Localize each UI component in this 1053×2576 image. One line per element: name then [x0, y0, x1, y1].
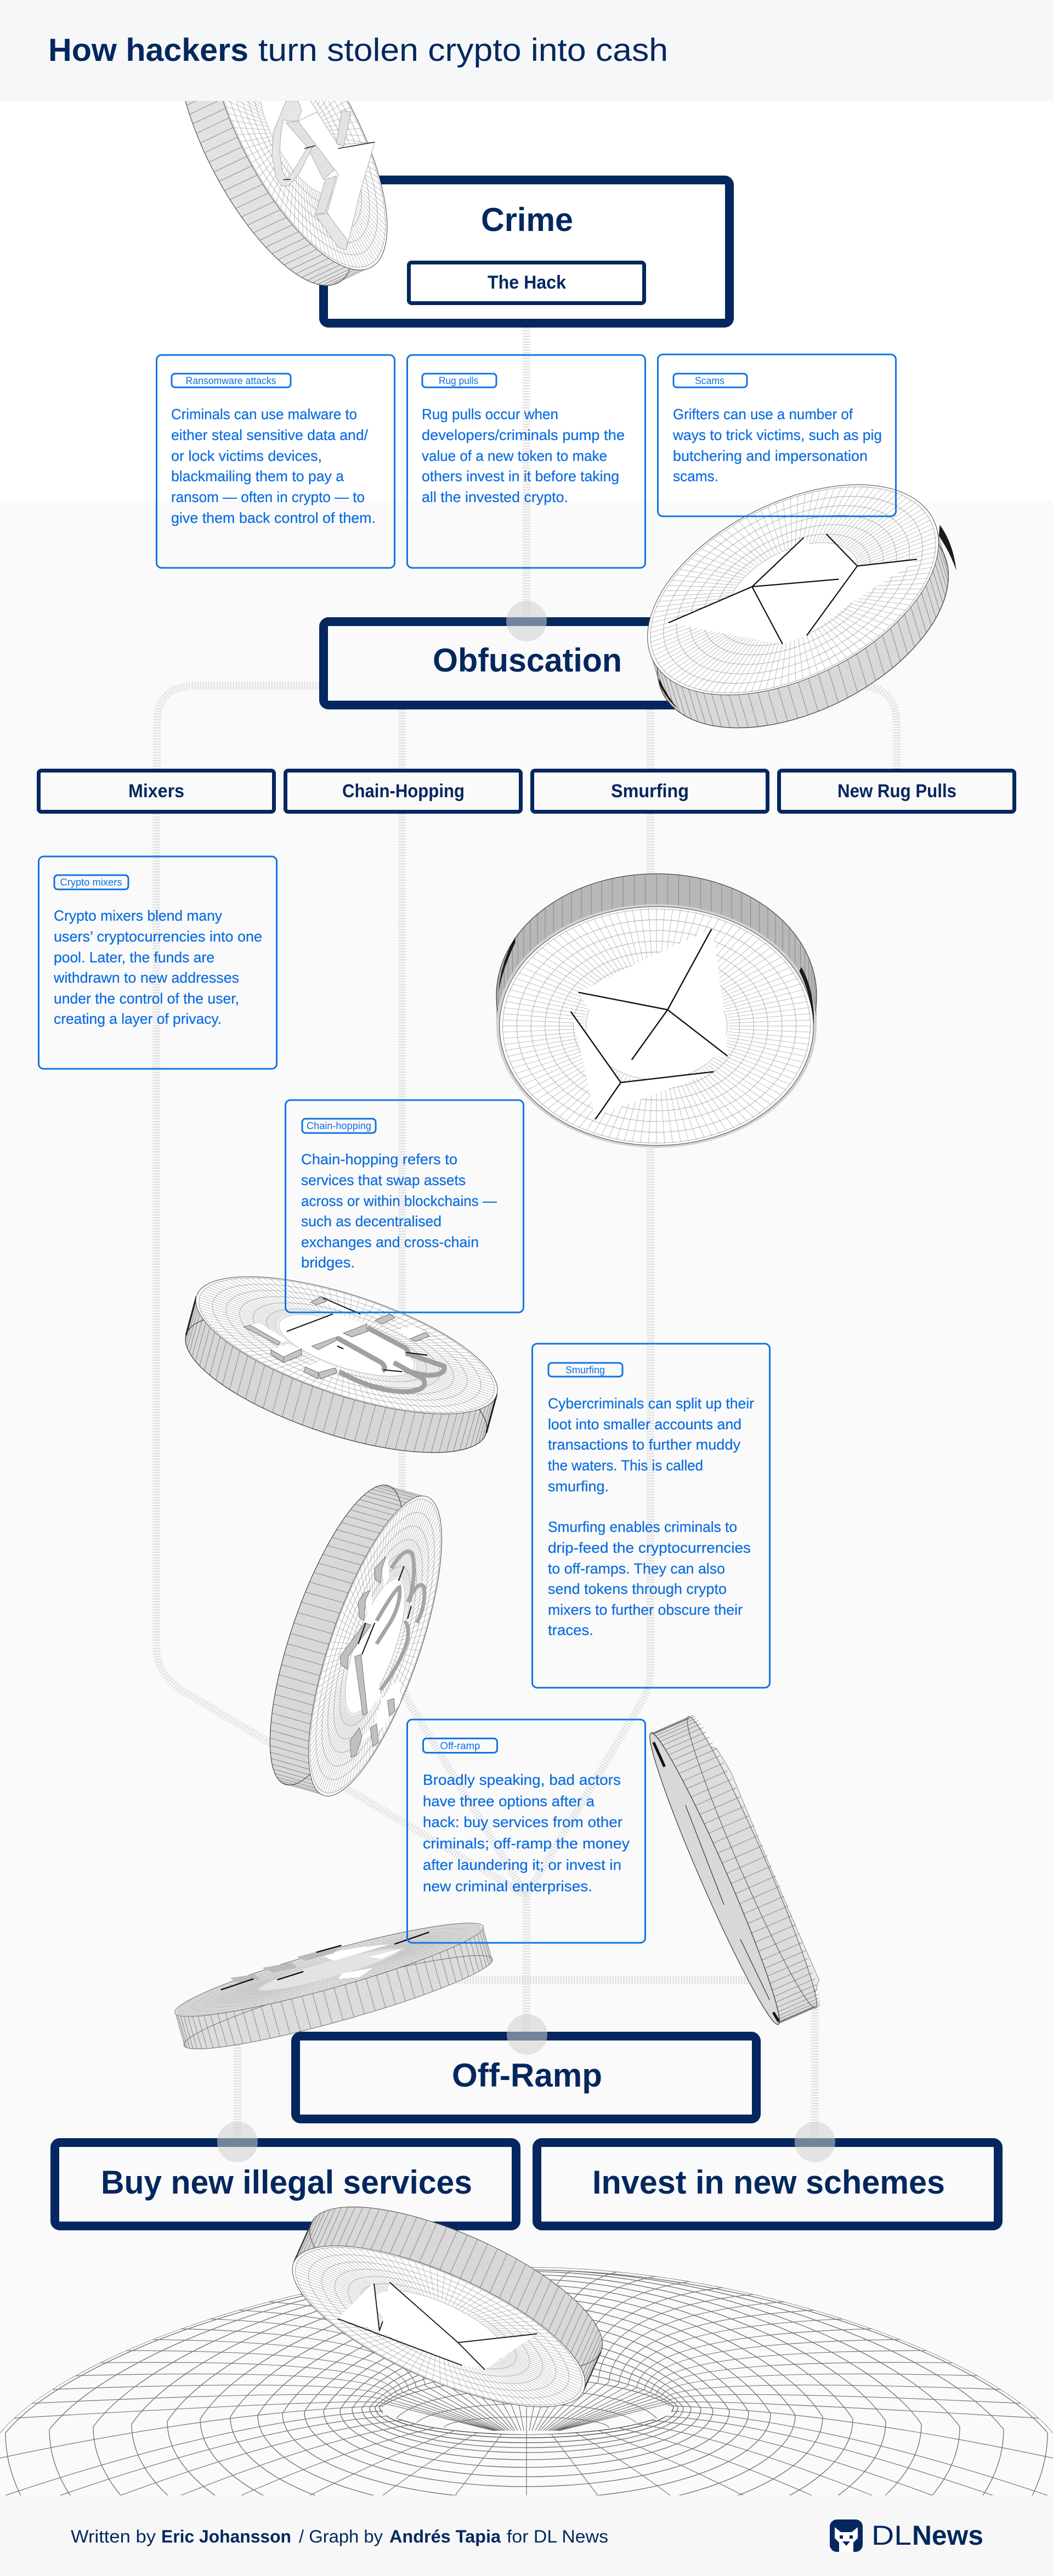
body text: value of a new token to make: [422, 448, 607, 464]
body text: Criminals can use malware to: [171, 406, 357, 422]
connector lines between stages: [156, 328, 897, 2142]
box: Off-Ramp: [296, 2036, 756, 2119]
tag: Rug pulls: Rug pulls: [439, 375, 478, 386]
tag: Chain-hopping: [302, 1119, 376, 1133]
body text: send tokens through crypto: [548, 1581, 727, 1597]
card: Scams: [658, 354, 896, 516]
card: Crypto mixers: [38, 856, 276, 1069]
body text: butchering and impersonation: [673, 448, 868, 464]
coin: bitcoin standing upright: [24, 1411, 469, 1808]
header band: [0, 0, 1053, 101]
box: Off-Ramp: Off-Ramp: [452, 2057, 602, 2094]
box: Invest in new schemes: Invest in new schemes: [592, 2164, 945, 2201]
card: Chain-hopping: [285, 1100, 523, 1312]
body text: [423, 1772, 630, 1895]
body text: have three options after a: [423, 1793, 595, 1810]
body text: after laundering it; or invest in: [423, 1857, 621, 1873]
box: Obfuscation: Obfuscation: [433, 642, 622, 679]
coin: coin seen edge-on at right: [639, 1696, 863, 2030]
body text: Crypto mixers blend many: [54, 907, 222, 924]
body text: [171, 406, 376, 526]
tag: Ransomware attacks: Ransomware attacks: [185, 375, 276, 386]
tag: Smurfing: Smurfing: [565, 1365, 605, 1376]
body text: [422, 406, 625, 505]
box: Crime: Crime: [481, 201, 573, 238]
tag: Crypto mixers: [54, 875, 128, 889]
card: Rug pulls: [407, 355, 645, 568]
connector nodes: [217, 601, 835, 2162]
box: Obfuscation: [324, 622, 729, 705]
logo: DL News: DL: [871, 2520, 912, 2551]
tag: Rug pulls: [422, 374, 496, 387]
coin: ethereum face-on in centre: [496, 173, 817, 1148]
tag: Scams: Scams: [695, 375, 724, 386]
body text: under the control of the user,: [54, 990, 239, 1007]
body text: blackmailing them to pay a: [171, 468, 344, 484]
body text: either steal sensitive data and/: [171, 427, 368, 443]
body text: ways to trick victims, such as pig: [672, 427, 882, 443]
card: Ransomware attacks: [157, 355, 395, 568]
footer credits: / Graph by: [299, 2527, 383, 2546]
tag: Chain-hopping: Chain-hopping: [307, 1120, 371, 1131]
tag: Crypto mixers: Crypto mixers: [60, 877, 122, 888]
box: Invest in new schemes: [537, 2143, 998, 2226]
footer band: [0, 2495, 1053, 2576]
box: Buy new illegal services: [55, 2143, 516, 2226]
box: Chain-Hopping: Chain-Hopping: [342, 781, 465, 802]
body text: Cybercriminals can split up their: [548, 1395, 754, 1412]
body text: services that swap assets: [301, 1172, 466, 1188]
body text: to off-ramps. They can also: [548, 1560, 725, 1577]
body text: smurfing.: [548, 1478, 609, 1495]
coin: coin lying almost flat above Off-Ramp: [169, 1908, 519, 2139]
box: Smurfing: Smurfing: [611, 781, 689, 802]
box: New Rug Pulls: New Rug Pulls: [837, 781, 956, 802]
box: New Rug Pulls: [779, 770, 1015, 812]
footer credits: [71, 2527, 608, 2546]
box: The Hack: [409, 262, 644, 303]
body text: hack: buy services from other: [423, 1814, 622, 1830]
body text: give them back control of them.: [171, 510, 376, 526]
logo: DL News: News: [912, 2520, 983, 2551]
funnel outer surface: [0, 2267, 1053, 2576]
tag: Off-ramp: [423, 1738, 497, 1752]
coin: bitcoin lying flat: [104, 1248, 511, 1732]
body text: Smurfing enables criminals to: [548, 1519, 737, 1535]
body text: Broadly speaking, bad actors: [423, 1772, 621, 1788]
body text: withdrawn to new addresses: [53, 969, 239, 986]
box: Smurfing: [532, 770, 768, 812]
tag: Smurfing: [548, 1363, 622, 1377]
body text: the waters. This is called: [548, 1457, 703, 1474]
body text: criminals; off-ramp the money: [423, 1835, 630, 1852]
body text: all the invested crypto.: [422, 489, 568, 505]
body text: developers/criminals pump the: [422, 427, 625, 443]
box: Chain-Hopping: [285, 770, 521, 812]
body text: transactions to further muddy: [548, 1436, 740, 1453]
footer credits: Eric Johansson: [161, 2527, 291, 2546]
funnel throat interior: [383, 2377, 670, 2436]
icon: bear badge: [830, 2519, 863, 2552]
body text: drip-feed the cryptocurrencies: [548, 1540, 751, 1556]
body text: traces.: [548, 1622, 593, 1638]
body text: Rug pulls occur when: [422, 406, 558, 422]
body text: pool. Later, the funds are: [54, 949, 214, 966]
body text: bridges.: [301, 1254, 355, 1271]
tag: Off-ramp: Off-ramp: [440, 1740, 480, 1751]
body text: such as decentralised: [301, 1213, 441, 1230]
body text: scams.: [673, 468, 718, 484]
body text: or lock victims devices,: [171, 448, 322, 464]
coin: top coin behind Crime box corner: [0, 0, 423, 441]
body text: new criminal enterprises.: [423, 1878, 592, 1895]
footer credits: for DL News: [507, 2527, 608, 2546]
card: Off-ramp: [407, 1720, 645, 1943]
coin: large ethereum right of Obfuscation: [624, 442, 1053, 1244]
body text: users’ cryptocurrencies into one: [54, 928, 262, 945]
body text: mixers to further obscure their: [548, 1602, 743, 1618]
card: Smurfing: [532, 1344, 770, 1688]
coin: ethereum falling into funnel: [272, 1925, 734, 2439]
body text: [548, 1395, 754, 1638]
box: The Hack: The Hack: [488, 272, 566, 293]
body text: [301, 1151, 497, 1271]
footer credits: Andrés Tapia: [389, 2527, 501, 2546]
footer credits: Written by: [71, 2527, 156, 2546]
body text: Grifters can use a number of: [673, 406, 853, 422]
body text: exchanges and cross-chain: [301, 1234, 479, 1250]
body text: [672, 406, 882, 484]
body text: [53, 907, 262, 1027]
box: Crime: [324, 180, 729, 323]
tag: Scams: [673, 374, 747, 387]
title: How hackers: [48, 32, 248, 68]
wireframe funnel surface: [0, 2267, 1053, 2495]
page background: white top section: [0, 0, 1053, 501]
body text: creating a layer of privacy.: [54, 1011, 222, 1027]
tag: Ransomware attacks: [172, 374, 291, 387]
body text: loot into smaller accounts and: [548, 1416, 741, 1433]
logo: DL News: [830, 2519, 983, 2552]
box: Buy new illegal services: Buy new illegal services: [101, 2164, 472, 2201]
body text: others invest in it before taking: [422, 468, 619, 484]
box: Mixers: [38, 770, 274, 812]
body text: ransom — often in crypto — to: [171, 489, 365, 505]
body text: Chain-hopping refers to: [301, 1151, 457, 1168]
title: turn stolen crypto into cash: [258, 32, 668, 68]
box: Mixers: Mixers: [128, 781, 184, 802]
body text: across or within blockchains —: [301, 1193, 497, 1209]
